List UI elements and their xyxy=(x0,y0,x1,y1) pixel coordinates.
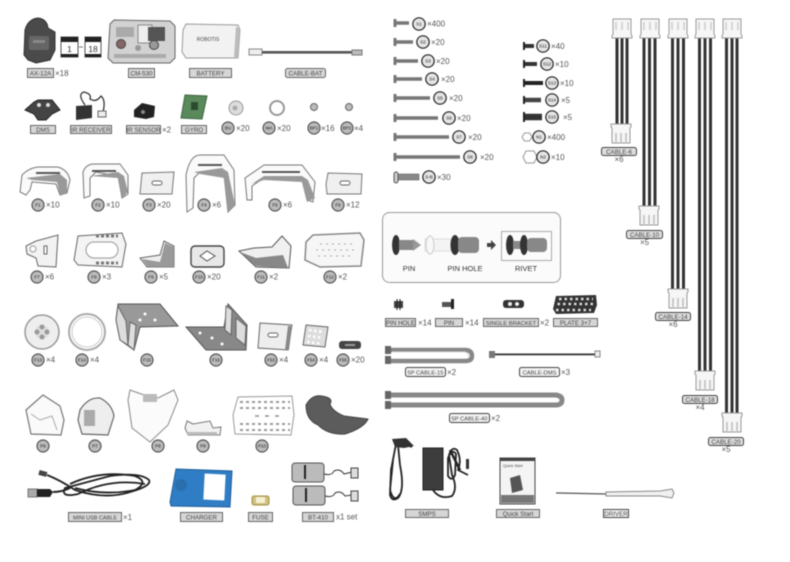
link F55 xyxy=(337,341,365,366)
plate 3x7 item xyxy=(553,295,598,327)
label F10: ×20 xyxy=(207,272,221,282)
nut BP2: ×4 xyxy=(354,124,364,133)
plate F7 xyxy=(26,235,58,267)
plate F8 xyxy=(74,233,126,267)
screws S1 to S8: ×20 xyxy=(480,153,494,162)
cable 14: ×6 xyxy=(668,320,678,329)
bracket F15: F15 xyxy=(143,358,151,362)
bushing BU: BU xyxy=(225,126,231,130)
cable 20: ×5 xyxy=(721,445,731,454)
icon: pin xyxy=(392,235,421,255)
washer WA: ×20 xyxy=(277,124,291,133)
label driver: DRIVER xyxy=(604,511,628,518)
label 5P cable 40: ×2 xyxy=(491,414,501,423)
DMS sensor xyxy=(25,100,60,120)
label F3: ×20 xyxy=(157,200,171,210)
cable 10: CABLE-10 xyxy=(630,232,660,239)
screws S1 to S8: S6 xyxy=(446,116,452,120)
label F4: ×6 xyxy=(212,200,222,210)
cable 18: CABLE-18 xyxy=(685,397,715,404)
label F6: F6 xyxy=(335,202,341,208)
disc F13 xyxy=(25,315,59,366)
arrow xyxy=(487,240,496,250)
screws S11 to S15 and nuts xyxy=(522,40,574,163)
screws S1 to S8: S7 xyxy=(456,134,462,140)
quick start manual: Quick Start xyxy=(503,463,524,468)
labels row 1: CM-530 xyxy=(130,70,153,78)
labels row 2: IR SENSOR xyxy=(126,127,161,134)
single bracket item xyxy=(484,300,550,328)
pin labels xyxy=(403,264,537,273)
labels row 1: AX-12A xyxy=(30,70,52,78)
screws S1 to S8: ×20 xyxy=(457,114,471,123)
nut BP1: BP1 xyxy=(310,126,319,130)
label quick start xyxy=(496,510,540,518)
label F1 xyxy=(32,199,60,211)
label 5P cable 15: 5P CABLE-15 xyxy=(408,370,443,376)
screws S1 to S8: S5 xyxy=(437,96,443,100)
screws S11 to S15 and nuts: S11 xyxy=(539,44,547,48)
screws S1 to S8 xyxy=(394,18,494,183)
plate 3x7 item: PLATE 3×7 xyxy=(560,320,592,327)
cover P7 xyxy=(78,398,114,452)
screws S1 to S8: ×30 xyxy=(437,173,451,182)
part P9: P9 xyxy=(200,444,206,448)
label F12: ×2 xyxy=(338,272,348,282)
bracket F5 xyxy=(245,165,315,202)
labels row 1 xyxy=(28,68,326,78)
label F5: ×6 xyxy=(283,200,293,210)
cable 6: ×6 xyxy=(614,155,624,164)
screws S11 to S15 and nuts: S15 xyxy=(548,114,556,120)
label F6: ×12 xyxy=(346,200,360,210)
pin labels: PIN xyxy=(403,264,415,273)
cable 10 xyxy=(626,19,662,247)
bushing BU: ×20 xyxy=(236,124,250,133)
label F2 xyxy=(92,199,120,211)
label 5P cable 15: ×2 xyxy=(447,368,457,377)
screws S1 to S8: S3 xyxy=(425,58,431,64)
pin hole item xyxy=(386,299,432,328)
angle F9 xyxy=(140,241,174,267)
5P cable 15 xyxy=(385,346,472,364)
ID stickers 1 to 18 xyxy=(61,37,101,57)
label F7: ×6 xyxy=(45,272,55,282)
single bracket item: SINGLE BRACKET xyxy=(486,321,537,327)
gray shell xyxy=(306,396,368,434)
labels row 1: BATTERY xyxy=(197,70,224,78)
cable 6 xyxy=(602,19,636,164)
label F5: F5 xyxy=(272,202,278,208)
label F7 xyxy=(31,271,55,283)
screws S11 to S15 and nuts: ×5 xyxy=(561,96,571,105)
plate F54: ×4 xyxy=(319,356,329,364)
pin item xyxy=(436,299,479,328)
bracket F15 xyxy=(116,304,178,366)
link F55: F55 xyxy=(339,358,347,362)
plate F53: ×4 xyxy=(279,356,289,364)
screws S11 to S15 and nuts: S13 xyxy=(548,80,556,86)
ID stickers 1 to 18: 18 xyxy=(88,44,98,54)
plate F54: F54 xyxy=(307,358,315,362)
battery: ROBOTIS xyxy=(197,37,220,43)
label F2: ×10 xyxy=(106,200,120,210)
gyro board xyxy=(181,95,207,119)
labels row 1: ×18 xyxy=(55,69,69,78)
label mini USB: ×1 xyxy=(123,513,133,522)
label SMPS xyxy=(406,510,448,518)
bracket F16 xyxy=(186,304,247,366)
charger: CHARGER xyxy=(186,514,217,522)
panel: pin and rivet assembly xyxy=(382,212,560,282)
screws S1 to S8: S1 xyxy=(416,22,422,26)
label F8 xyxy=(88,271,112,283)
BT-410 modules: BT-410 xyxy=(308,514,329,522)
screws S1 to S8: S-B xyxy=(425,174,433,180)
pin item: PIN xyxy=(444,320,454,327)
screws S1 to S8: ×20 xyxy=(436,57,450,66)
washer WA: WA xyxy=(265,126,273,130)
cable 10: ×5 xyxy=(640,238,650,247)
labels row 2: ×2 xyxy=(162,126,172,134)
pin labels: RIVET xyxy=(515,264,537,273)
label F3: F3 xyxy=(146,202,152,208)
labels row 2 xyxy=(30,126,206,134)
screws S11 to S15 and nuts: ×400 xyxy=(547,133,566,142)
cable 18: ×4 xyxy=(695,403,705,412)
label 5P cable 15 xyxy=(406,368,457,377)
screws S1 to S8: S4 xyxy=(429,76,435,82)
label F1: ×10 xyxy=(46,200,60,210)
label F11: ×2 xyxy=(269,272,279,282)
BT-410 modules: x1 set xyxy=(336,512,358,522)
labels row 2: IR RECEIVER xyxy=(71,127,111,134)
ID stickers 1 to 18: 1 xyxy=(67,44,72,54)
label F11 xyxy=(255,271,279,283)
cable 14 xyxy=(656,19,690,329)
bracket F16: F16 xyxy=(212,358,220,362)
cable 14: CABLE-14 xyxy=(658,314,688,321)
screws S11 to S15 and nuts: ×5 xyxy=(563,113,573,122)
label F9: ×5 xyxy=(159,272,169,282)
frame plate P10: P10 xyxy=(258,444,266,448)
bracket F1 xyxy=(20,167,70,195)
labels row 2: DMS xyxy=(36,127,50,134)
label F5 xyxy=(269,199,293,211)
nut BP1: ×16 xyxy=(321,124,335,133)
IR sensor xyxy=(134,103,155,119)
link F55: ×20 xyxy=(351,356,365,364)
SMPS power supply xyxy=(390,438,469,499)
label F11: F11 xyxy=(257,274,265,280)
plate F53: F53 xyxy=(267,358,275,362)
screws S11 to S15 and nuts: N1 xyxy=(536,134,542,140)
label 5P cable 40: 5P CABLE-40 xyxy=(452,416,487,422)
pin labels: PIN HOLE xyxy=(447,264,483,273)
bracket F4 xyxy=(186,155,235,212)
screws S1 to S8: ×20 xyxy=(431,38,445,47)
plate F3 xyxy=(140,172,174,194)
screws S1 to S8: ×400 xyxy=(427,20,446,28)
cable 6: CABLE-6 xyxy=(606,149,632,156)
icon: ghost pin and pin hole xyxy=(425,235,479,255)
label F1: F1 xyxy=(35,202,41,208)
BT-410 modules xyxy=(292,463,358,522)
label F12 xyxy=(324,271,348,283)
mini USB cable xyxy=(28,470,149,497)
battery xyxy=(182,24,240,58)
5P cable 40 xyxy=(385,391,562,409)
label F8: ×3 xyxy=(102,272,112,282)
screwdriver xyxy=(556,489,674,498)
label F7: F7 xyxy=(34,274,40,280)
frame plate P10 xyxy=(233,396,294,452)
charger xyxy=(170,469,232,522)
label 5P cable 40 xyxy=(450,414,501,423)
cover P6 xyxy=(26,395,64,452)
screws S11 to S15 and nuts: ×40 xyxy=(551,42,565,51)
screws S1 to S8: ×20 xyxy=(441,75,455,84)
screws S11 to S15 and nuts: ×10 xyxy=(555,60,569,69)
screws S11 to S15 and nuts: N2 xyxy=(540,154,546,160)
label F8: F8 xyxy=(91,274,97,280)
cover P6: P6 xyxy=(40,444,46,448)
screws S11 to S15 and nuts: S14 xyxy=(548,98,556,102)
label F9 xyxy=(145,271,169,283)
label mini USB xyxy=(68,512,133,522)
cable BAT xyxy=(249,49,362,55)
nut BP1 xyxy=(308,104,335,134)
pin item: ×14 xyxy=(465,318,479,328)
plate F12 xyxy=(305,233,364,267)
label F4: F4 xyxy=(201,202,207,208)
nut BP2 xyxy=(341,104,364,134)
chest cover P8: P8 xyxy=(155,444,161,448)
label cable DMS: ×3 xyxy=(561,368,571,377)
cable 18 xyxy=(682,19,718,412)
ring F14: ×4 xyxy=(90,356,100,364)
part P9 xyxy=(185,421,221,452)
label SMPS: SMPS xyxy=(418,511,436,518)
bushing BU xyxy=(222,101,250,134)
screws S11 to S15 and nuts: ×10 xyxy=(560,79,574,88)
cable DMS xyxy=(489,351,600,358)
cover P7: P7 xyxy=(92,444,98,448)
label F4 xyxy=(198,199,222,211)
label cable DMS xyxy=(520,368,571,377)
fuse: FUSE xyxy=(252,514,269,522)
ring F14: F14 xyxy=(78,358,86,362)
nut BP2: BP2 xyxy=(343,126,352,130)
fuse xyxy=(248,496,272,522)
pin hole item: ×14 xyxy=(418,318,432,328)
pin hole item: PIN HOLE xyxy=(386,320,415,327)
label F3 xyxy=(143,199,171,211)
label F2: F2 xyxy=(95,202,101,208)
cable 20: CABLE-20 xyxy=(711,439,741,446)
label F10 xyxy=(193,271,221,283)
disc F13: ×4 xyxy=(46,356,56,364)
servo AX-12A xyxy=(24,18,55,63)
screws S11 to S15 and nuts: ×10 xyxy=(551,153,565,162)
screws S1 to S8: ×20 xyxy=(468,133,482,142)
single bracket item: ×2 xyxy=(540,318,550,328)
label F6 xyxy=(332,199,360,211)
screws S1 to S8: S8 xyxy=(467,154,473,160)
plate F54 xyxy=(303,325,329,366)
label quick start: Quick Start xyxy=(503,511,534,518)
rivet box xyxy=(502,232,552,260)
ring F14 xyxy=(69,314,105,366)
screws S1 to S8: ×20 xyxy=(449,94,463,103)
washer WA xyxy=(263,101,291,134)
plate F10 xyxy=(191,246,224,267)
label F9: F9 xyxy=(148,274,154,280)
labels row 1: CABLE-BAT xyxy=(289,70,323,78)
bracket F11 xyxy=(239,236,291,268)
controller CM-530 xyxy=(108,20,175,63)
cable 20 xyxy=(708,19,744,454)
plate F53 xyxy=(258,323,292,366)
label F12: F12 xyxy=(326,274,334,280)
disc F13: F13 xyxy=(34,358,42,362)
plate F6 xyxy=(326,173,362,194)
IR receiver xyxy=(76,92,106,120)
bracket F2 xyxy=(83,164,128,198)
label cable DMS: CABLE-DMS xyxy=(523,370,557,376)
quick start manual xyxy=(500,458,535,504)
screws S11 to S15 and nuts: S12 xyxy=(543,62,551,66)
screws S1 to S8: S2 xyxy=(420,40,426,44)
chest cover P8 xyxy=(128,390,178,452)
labels row 2: GYRO xyxy=(185,127,203,134)
label mini USB: MINI USB CABLE xyxy=(73,516,117,522)
label F10: F10 xyxy=(195,274,203,280)
